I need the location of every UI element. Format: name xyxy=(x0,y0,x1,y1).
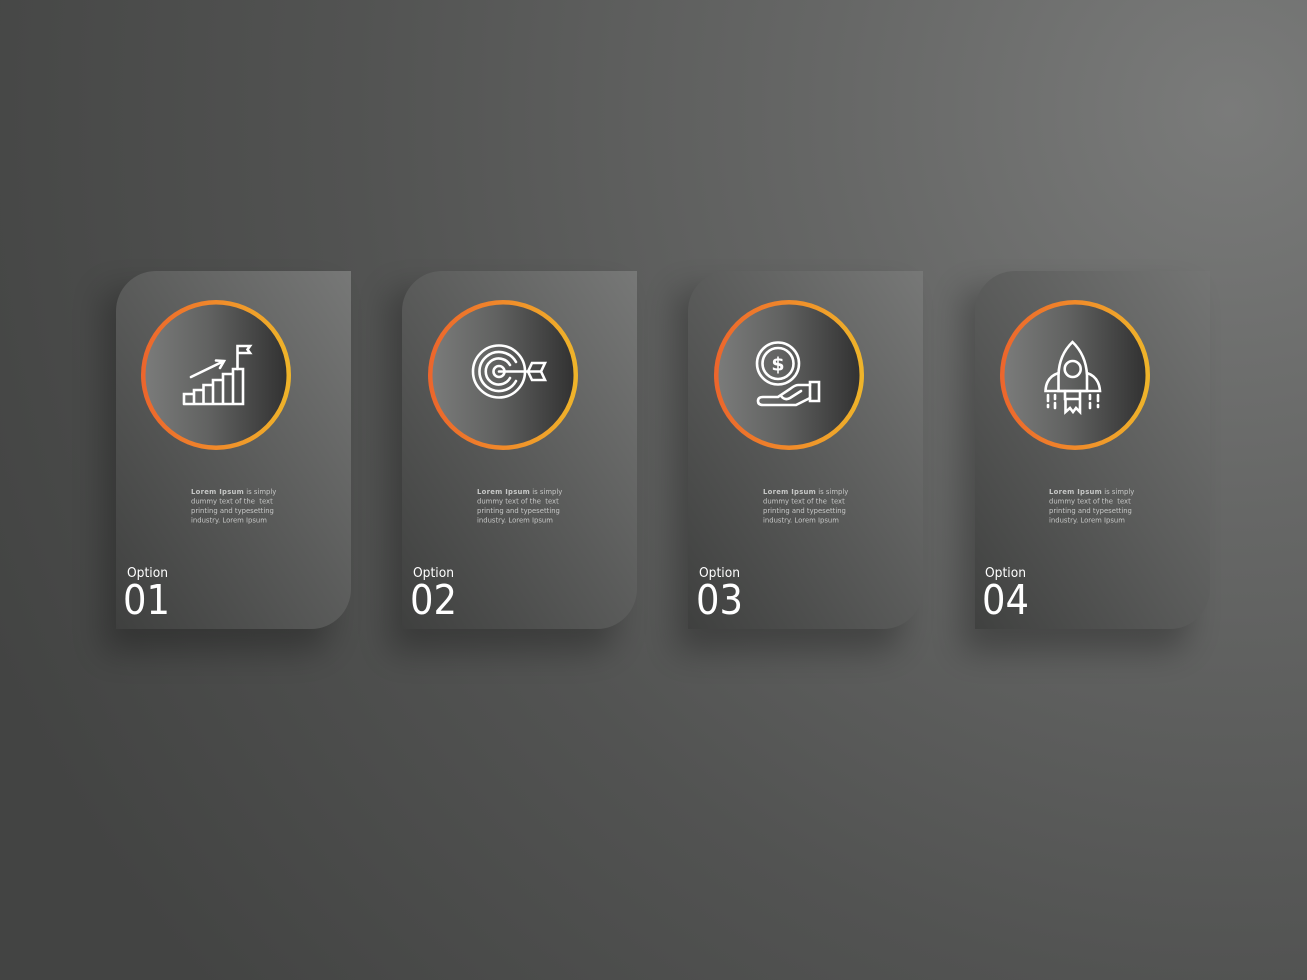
text: description 01: industry. Lorem Ipsum xyxy=(191,516,267,524)
text: description 04: dummy text of the text xyxy=(1049,498,1131,506)
text: description 02: dummy text of the text xyxy=(477,498,559,506)
label: option 01: Option xyxy=(127,565,168,581)
circle badge 04 xyxy=(1000,300,1150,450)
number 01: 01 xyxy=(123,576,170,624)
text: description 02: Lorem Ipsum is simply xyxy=(477,488,562,496)
panel: option 03 xyxy=(688,271,923,629)
text: description 03: dummy text of the text xyxy=(763,498,845,506)
text: description 02: printing and typesetting xyxy=(477,507,560,515)
label: option 03: Option xyxy=(699,565,740,581)
text: description 03: industry. Lorem Ipsum xyxy=(763,516,839,524)
label: option 04: Option xyxy=(985,565,1026,581)
label: option 02: Option xyxy=(413,565,454,581)
circle badge 02 xyxy=(428,300,578,450)
text: description 02: industry. Lorem Ipsum xyxy=(477,516,553,524)
icon: target with dart xyxy=(473,346,545,398)
circle badge 01 xyxy=(141,300,291,450)
panel: option 04 xyxy=(975,271,1210,629)
text: description 01: Lorem Ipsum is simply xyxy=(191,488,276,496)
text: description 04: industry. Lorem Ipsum xyxy=(1049,516,1125,524)
number 04: 04 xyxy=(982,576,1029,624)
text: description 03: Lorem Ipsum is simply xyxy=(763,488,848,496)
panel: option 01 xyxy=(116,271,351,629)
icon: coin in hand xyxy=(757,342,819,405)
text: description 04: Lorem Ipsum is simply xyxy=(1049,488,1134,496)
icon: growth chart with flag xyxy=(184,346,250,404)
text: description 01: printing and typesetting xyxy=(191,507,274,515)
icon: coin in hand: $ xyxy=(771,354,785,376)
text: description 04: printing and typesetting xyxy=(1049,507,1132,515)
circle badge 03 xyxy=(714,300,864,450)
number 02: 02 xyxy=(410,576,457,624)
icon: rocket xyxy=(1046,342,1100,412)
text: description 01: dummy text of the text xyxy=(191,498,273,506)
panel: option 02 xyxy=(402,271,637,629)
number 03: 03 xyxy=(696,576,743,624)
text: description 03: printing and typesetting xyxy=(763,507,846,515)
